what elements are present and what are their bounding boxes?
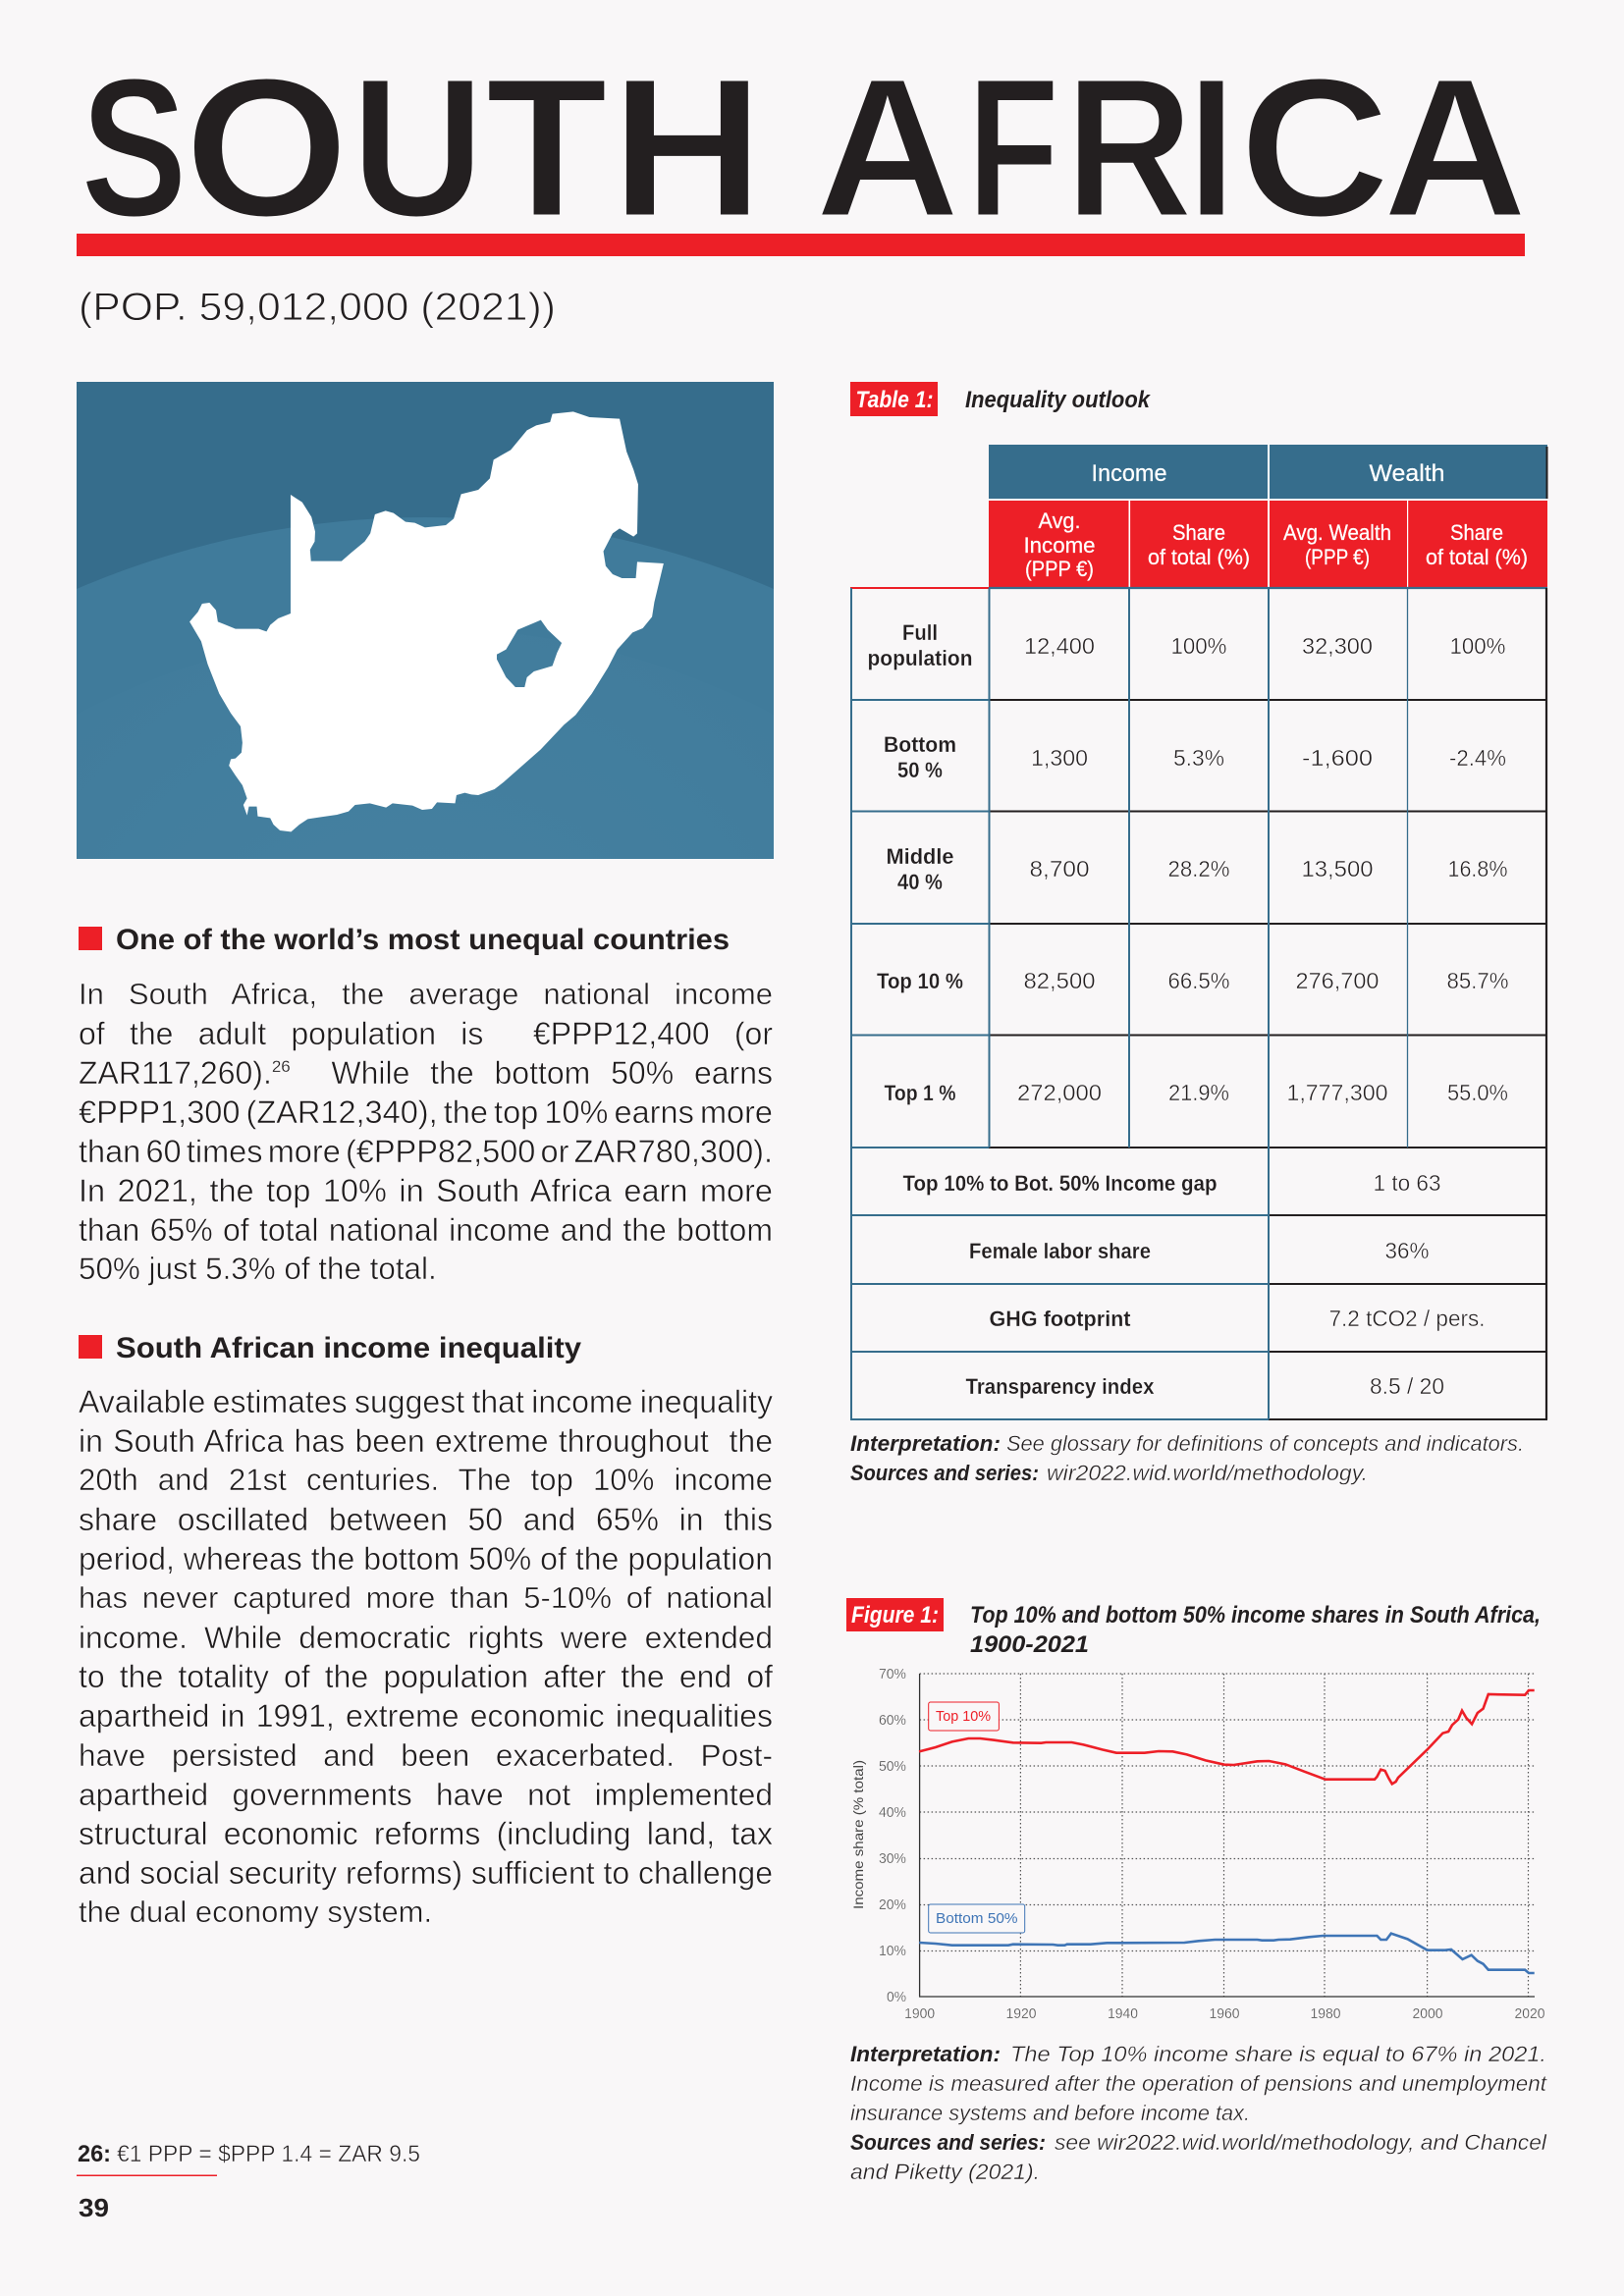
heading: one of the most unequal countries: One of the world’s most unequal countries — [116, 924, 730, 956]
x axis labels: 2000 — [1412, 2005, 1443, 2022]
row: top 10%: Top 10 % — [877, 969, 963, 993]
row: full population — [868, 620, 1506, 670]
row: full population: 100% — [1449, 633, 1506, 659]
text block: South African income inequality: income. While democratic rights were extended — [79, 1620, 773, 1655]
x axis labels: 2020 — [1514, 2005, 1545, 2022]
table sub-header: Share — [1172, 520, 1225, 545]
table sub-header: (PPP €) — [1025, 557, 1094, 581]
y axis labels: 70% — [879, 1666, 906, 1682]
table heading — [850, 382, 1152, 416]
row: top 10%: 66.5% — [1168, 968, 1229, 993]
y axis labels: 10% — [879, 1943, 906, 1959]
title: F — [967, 36, 1059, 258]
text block: South African income inequality: apartheid in 1991, extreme economic inequalities — [79, 1698, 773, 1734]
table sub-header — [989, 501, 1547, 587]
text block: one of the most unequal countries: than 65% of total national income and the bottom — [79, 1212, 773, 1248]
figure title — [970, 1602, 1541, 1658]
title: U — [352, 36, 485, 258]
figure title: 1900-2021 — [970, 1631, 1089, 1658]
table notes — [850, 1431, 1524, 1485]
text block: South African income inequality: have persisted and been exacerbated. Post- — [79, 1737, 773, 1773]
table sub-header: Share — [1450, 520, 1503, 545]
row: full population: 100% — [1170, 633, 1227, 659]
x axis labels — [904, 2005, 1545, 2022]
table notes: Interpretation: — [850, 1431, 1001, 1456]
figure notes: insurance systems and before income tax. — [850, 2101, 1250, 2125]
row: middle 40%: 8,700 — [1029, 856, 1090, 881]
text block: one of the most unequal countries — [79, 977, 773, 1286]
table sub-header: of total (%) — [1426, 545, 1528, 569]
figure title: Top 10% and bottom 50% income shares in South Africa, — [970, 1602, 1541, 1629]
row: bottom 50%: -1,600 — [1302, 745, 1373, 771]
text block: South African income inequality: Available estimates suggest that income inequality — [79, 1384, 773, 1419]
table label — [850, 382, 938, 416]
title: O — [185, 36, 350, 258]
row: top 1%: 272,000 — [1017, 1080, 1102, 1105]
chart gridlines — [920, 1674, 1535, 1997]
table sub-header: Income — [1023, 533, 1096, 558]
row: transparency index: Transparency index — [966, 1374, 1155, 1399]
x axis labels: 1980 — [1310, 2005, 1341, 2022]
row: income gap — [903, 1170, 1441, 1196]
y axis labels: 0% — [887, 1989, 906, 2005]
figure heading — [846, 1598, 1541, 1658]
table title: Inequality outlook — [965, 387, 1152, 413]
row: top 1%: 21.9% — [1168, 1080, 1229, 1105]
row: top 1%: 1,777,300 — [1286, 1080, 1388, 1105]
line chart: income shares — [850, 1666, 1545, 2022]
row: bottom 50%: Bottom — [884, 732, 956, 757]
row: full population: 12,400 — [1024, 633, 1095, 659]
footnote: 26: — [78, 2141, 111, 2167]
row: middle 40%: 28.2% — [1168, 856, 1229, 881]
panel: map of South Africa — [77, 382, 774, 859]
table label: Table 1: — [856, 387, 933, 413]
row: female labor share — [969, 1238, 1430, 1263]
text block: one of the most unequal countries: 50% just 5.3% of the total. — [79, 1252, 437, 1286]
table notes: wir2022.wid.world/methodology. — [1047, 1461, 1368, 1485]
row: middle 40%: 16.8% — [1447, 856, 1508, 881]
legend: top 10% — [929, 1702, 999, 1731]
text block: South African income inequality: 20th and 21st centuries. The top 10% income — [79, 1463, 773, 1497]
text block: South African income inequality: to the totality of the population after the end of — [79, 1659, 773, 1694]
row: GHG footprint — [990, 1306, 1485, 1331]
table header: income and wealth — [989, 445, 1547, 499]
figure notes: see wir2022.wid.world/methodology, and Chancel — [1055, 2130, 1547, 2155]
x axis labels: 1900 — [904, 2005, 935, 2022]
row: middle 40%: Middle — [886, 844, 954, 869]
text block: South African income inequality: has never captured more than 5-10% of national — [79, 1580, 773, 1615]
footnote: €1 PPP = $PPP 1.4 = ZAR 9.5 — [117, 2141, 420, 2167]
legend: bottom 50% — [929, 1904, 1025, 1933]
series: top 10% — [919, 1690, 1535, 1784]
x axis labels: 1920 — [1005, 2005, 1037, 2022]
y axis title: Income share (% total) — [850, 1760, 866, 1909]
y axis labels — [879, 1666, 906, 2005]
figure notes — [850, 2042, 1547, 2184]
x axis labels: 1960 — [1210, 2005, 1239, 2022]
row: full population: 32,300 — [1302, 633, 1373, 659]
table notes: Sources and series: — [850, 1461, 1039, 1485]
icon: country silhouette — [189, 411, 664, 832]
row: top 10%: 82,500 — [1023, 968, 1096, 993]
row: top 10%: 85.7% — [1447, 968, 1508, 993]
footnote rule — [77, 2175, 217, 2176]
title: I — [1188, 36, 1235, 258]
text block: one of the most unequal countries: In 2021, the top 10% in South Africa earn more — [79, 1173, 773, 1208]
row: top 10%: 276,700 — [1296, 968, 1379, 993]
heading: South African income inequality: South African income inequality — [116, 1332, 581, 1364]
table sub-header: (PPP €) — [1305, 545, 1370, 569]
page number: 39 — [79, 2193, 109, 2222]
text block: one of the most unequal countries: ZAR117,260).26 While the bottom 50% earns — [79, 1055, 773, 1091]
row: transparency index — [966, 1373, 1444, 1399]
text block: South African income inequality — [79, 1384, 774, 1929]
row: female labor share: 36% — [1384, 1238, 1430, 1263]
table: inequality outlook — [850, 445, 1547, 1419]
y axis labels: 20% — [879, 1896, 906, 1913]
title: C — [1239, 36, 1390, 258]
text block: one of the most unequal countries: In South Africa, the average national income — [79, 977, 773, 1011]
row: full population: population — [868, 646, 972, 670]
chart axes — [920, 1674, 1535, 1997]
text block: one of the most unequal countries: of the adult population is €PPP12,400 (or — [79, 1016, 773, 1051]
title: A — [1382, 36, 1528, 258]
y axis labels: 50% — [879, 1758, 906, 1775]
row: middle 40% — [886, 844, 1508, 894]
row: bottom 50% — [884, 732, 1506, 782]
legend: top 10%: Top 10% — [936, 1708, 991, 1725]
row: top 1% — [884, 1080, 1508, 1105]
text block: one of the most unequal countries: than 60 times more (€PPP82,500 or ZAR780,300). — [79, 1134, 773, 1169]
table grid — [850, 588, 1547, 1419]
y axis labels: 40% — [879, 1804, 906, 1821]
table sub-header: of total (%) — [1148, 545, 1250, 569]
title: R — [1065, 36, 1193, 258]
row: full population: Full — [902, 620, 938, 645]
figure notes: Interpretation: — [850, 2042, 1001, 2066]
text block: South African income inequality: apartheid governments have not implemented — [79, 1777, 773, 1812]
row: bottom 50%: 1,300 — [1031, 745, 1088, 771]
row: GHG footprint: GHG footprint — [990, 1307, 1131, 1331]
text block: South African income inequality: and social security reforms) sufficient to challenge — [79, 1855, 773, 1891]
row: bottom 50%: 50 % — [897, 758, 943, 782]
row: top 1%: 55.0% — [1447, 1080, 1508, 1105]
text block: South African income inequality: structural economic reforms (including land, tax — [79, 1816, 773, 1851]
title — [81, 36, 1528, 258]
row: middle 40%: 40 % — [897, 870, 943, 894]
row: top 10% — [877, 968, 1508, 993]
text block: one of the most unequal countries: €PPP1,300 (ZAR12,340), the top 10% earns more — [79, 1095, 773, 1130]
figure notes: Sources and series: — [850, 2130, 1046, 2155]
title: T — [485, 36, 608, 258]
table header: income and wealth: Wealth — [1369, 460, 1445, 487]
row: income gap: 1 to 63 — [1373, 1170, 1441, 1196]
table notes: See glossary for definitions of concepts and indicators. — [1006, 1431, 1524, 1456]
figure notes: and Piketty (2021). — [850, 2160, 1040, 2184]
text block: South African income inequality: the dual economy system. — [79, 1895, 432, 1929]
legend: bottom 50%: Bottom 50% — [936, 1910, 1017, 1927]
series: bottom 50% — [919, 1934, 1535, 1973]
figure notes: The Top 10% income share is equal to 67% in 2021. — [1010, 2042, 1546, 2066]
row: bottom 50%: 5.3% — [1173, 745, 1224, 771]
row: GHG footprint: 7.2 tCO2 / pers. — [1329, 1306, 1485, 1331]
table header: income and wealth: Income — [1092, 460, 1166, 487]
title: H — [611, 36, 764, 258]
x axis labels: 1940 — [1108, 2005, 1138, 2022]
title: S — [81, 36, 188, 258]
row: middle 40%: 13,500 — [1302, 856, 1373, 881]
row: top 1%: Top 1 % — [884, 1081, 956, 1105]
figure notes: Income is measured after the operation of pensions and unemployment — [850, 2071, 1547, 2096]
row: female labor share: Female labor share — [969, 1239, 1151, 1263]
row: transparency index: 8.5 / 20 — [1370, 1373, 1444, 1399]
table sub-header: Avg. — [1039, 508, 1080, 533]
chart series — [919, 1688, 1535, 1975]
figure label: Figure 1: — [851, 1602, 939, 1629]
subtitle: population: (POP. 59,012,000 (2021)) — [79, 286, 556, 329]
row: income gap: Top 10% to Bot. 50% Income gap — [903, 1171, 1218, 1196]
text block: South African income inequality: share oscillated between 50 and 65% in this — [79, 1502, 773, 1537]
text block: South African income inequality: period, whereas the bottom 50% of the population — [79, 1541, 773, 1576]
text block: South African income inequality: in South Africa has been extreme throughout the — [79, 1423, 773, 1459]
table sub-header: Avg. Wealth — [1283, 520, 1391, 545]
title: A — [815, 36, 960, 258]
title red rule — [77, 234, 1525, 256]
row: bottom 50%: -2.4% — [1449, 745, 1506, 771]
y axis labels: 30% — [879, 1850, 906, 1867]
y axis labels: 60% — [879, 1712, 906, 1729]
